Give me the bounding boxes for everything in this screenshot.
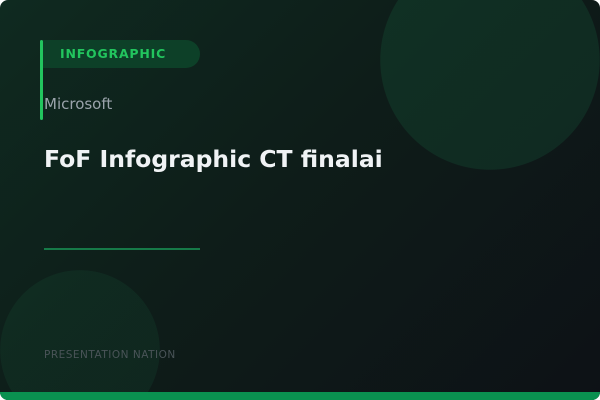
- badge: [43, 40, 200, 68]
- badge: INFOGRAPHIC: [60, 46, 166, 61]
- bottom bar: [0, 392, 600, 400]
- accent bar: [40, 40, 43, 120]
- divider line: [44, 248, 200, 250]
- subtitle: Microsoft: [44, 95, 112, 113]
- footer brand: PRESENTATION NATION: [44, 349, 176, 361]
- decorative circle top-right: [380, 0, 600, 170]
- title: FoF Infographic CT finalai: [44, 145, 383, 173]
- decorative circle bottom-left: [0, 270, 160, 400]
